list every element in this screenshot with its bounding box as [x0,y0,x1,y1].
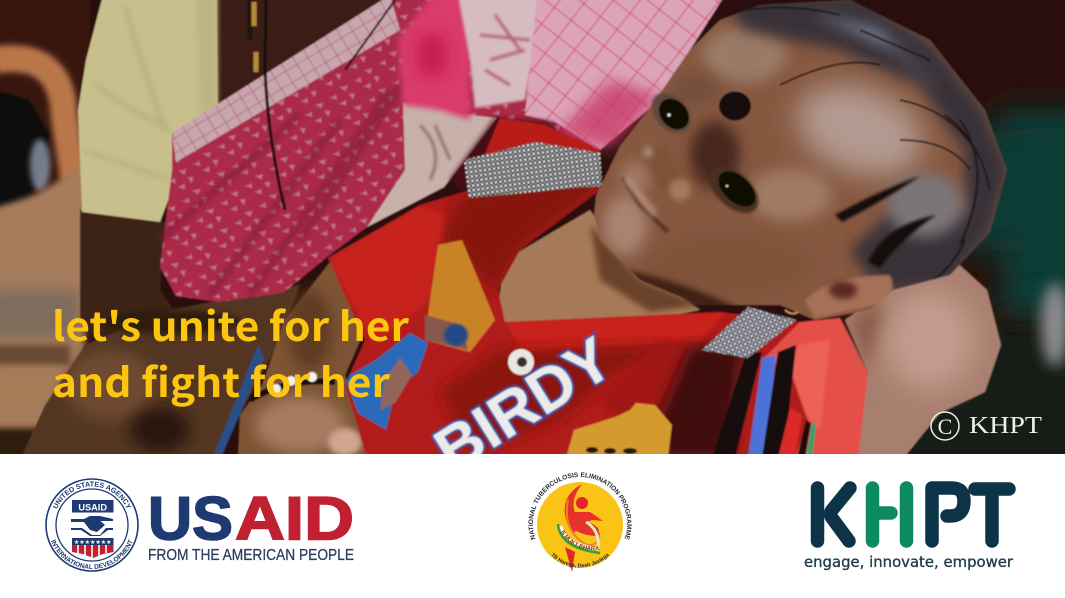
baby's red shirt [327,117,869,454]
baby's arm and hand [238,262,370,460]
sari hot pink rose [398,0,470,120]
cheek and jaw [728,306,733,307]
gingham collar, right [702,307,796,358]
USAID logo [45,478,354,572]
mother's right arm [845,258,1001,460]
USAID seal [45,478,139,572]
hair [720,0,1010,295]
headline: and fight for her [52,351,391,409]
National Tuberculosis Elimination Programme logo [528,472,632,572]
mother's forearm and hand [20,285,300,460]
shirt button [508,349,534,375]
headline [52,295,410,409]
headline: let's unite for her [52,295,410,353]
black bindi [719,92,751,120]
gold earring [785,310,798,314]
shadow under sari [450,118,560,195]
photo copyright [931,412,1042,440]
coral sleeve [760,318,868,458]
background: chair and floor [0,0,90,470]
sari lattice border [525,0,725,150]
mother's blouse sleeve [78,0,218,222]
KHPT tagline: engage, innovate, empower [804,553,1014,571]
tricolour ribbon [558,522,600,553]
TB Mukt Bharat: TB MUKT BHARAT [560,530,599,550]
sleeve stripes [712,345,816,458]
USAID wordmark: AID [235,484,354,552]
shadows around eyes [690,121,740,189]
baby's upper eye [644,85,698,141]
baby's lower eye [701,158,767,222]
mouth [622,178,668,232]
sari pale panel with branches [458,0,545,108]
ear [805,275,893,318]
yellow disc [537,482,623,568]
slogan: TB Harega, Desh Jeetega [552,552,610,568]
cartoon print: teddy bear [566,403,672,458]
USAID seal: UNITED STATES AGENCY [52,482,132,508]
USAID wordmark [148,484,354,552]
gingham collar, left [464,142,602,198]
USAID wordmark: US [148,484,233,552]
USAID tagline: FROM THE AMERICAN PEOPLE [148,547,354,564]
KHPT logo [804,488,1014,571]
forehead highlight [785,68,935,192]
skin base [590,0,1010,325]
handshake [71,516,113,536]
figure [565,484,603,572]
mother's upper arm [80,210,175,345]
cartoon print: orange figure [425,240,495,352]
blue trim on mother's garment [214,345,264,455]
photo copyright: KHPT [969,413,1042,439]
black bead necklace [250,0,395,210]
programme name arc: NATIONAL TUBERCULOSIS ELIMINATION PROGRAMME [528,472,632,540]
mother's neck and chest [218,0,380,102]
shield: ★★★★★★★ [74,539,112,546]
baby's chest [495,210,700,330]
baby's bead bracelet [250,372,335,400]
shirt print lettering: BIRDY [423,324,625,486]
KHPT letters [818,488,1009,541]
cartoon print: blue figure [345,333,428,430]
sari fold shadows [160,80,405,295]
baby's head [593,0,1008,320]
sari checked border [172,0,400,162]
sari pale leaf panel [367,100,497,227]
photo copyright: C [938,414,952,439]
sari [160,0,725,302]
USAID seal: USAID [78,502,107,512]
USAID seal: INTERNATIONAL DEVELOPMENT [51,539,132,569]
nose [643,145,692,202]
